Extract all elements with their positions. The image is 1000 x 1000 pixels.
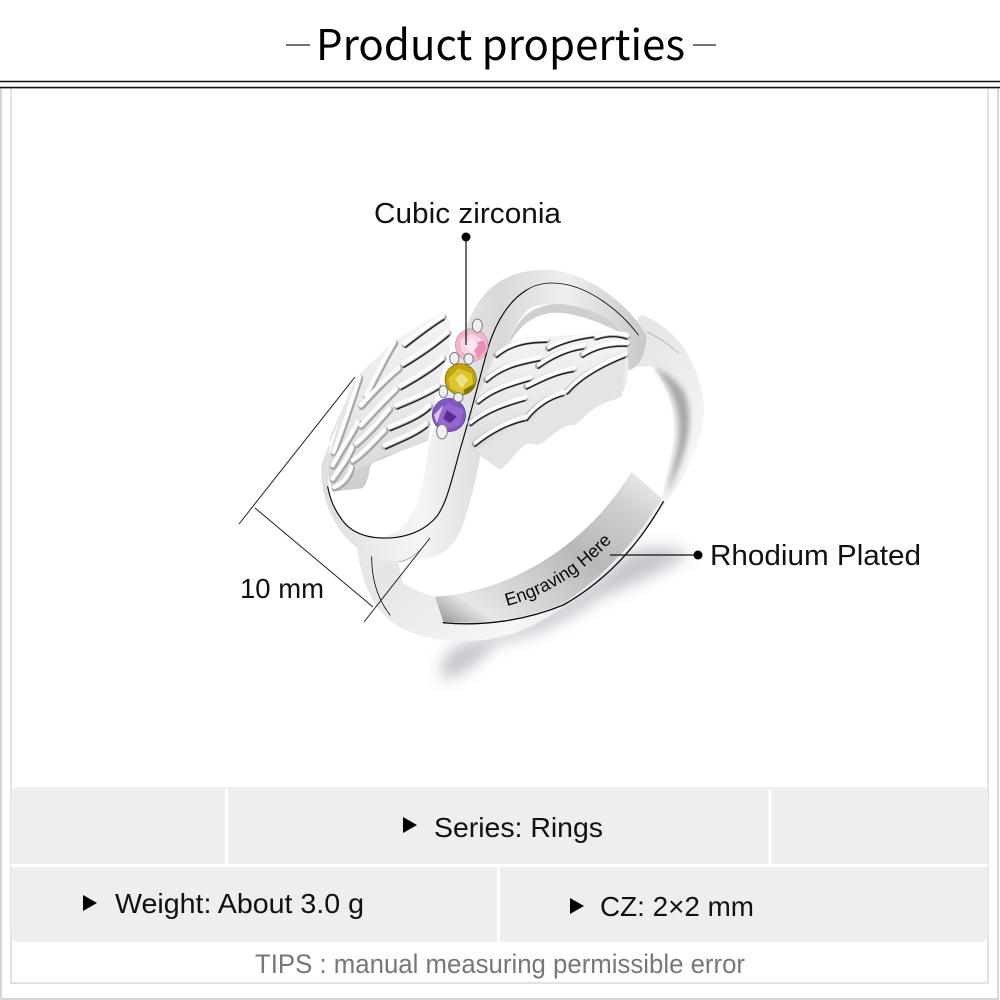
stones: [432, 319, 488, 439]
callout: cubic zirconia: [374, 198, 562, 345]
ribbon groove: [328, 283, 638, 562]
left lobe hole: [368, 440, 427, 528]
infinity ribbon: [321, 270, 647, 561]
right wing: [467, 332, 628, 470]
spec: series: Series: Rings: [434, 812, 603, 843]
title: Product properties: [316, 12, 685, 73]
pink stone: [455, 329, 488, 361]
spec: weight: Weight: About 3.0 g: [115, 888, 364, 919]
band groove: [372, 332, 678, 624]
specs table: [11, 787, 988, 942]
dimension: 10 mm: [239, 377, 430, 622]
callout: rhodium plated: [610, 540, 921, 572]
left wing: [328, 313, 450, 492]
ring shadow: [441, 548, 690, 680]
callout: rhodium plated: Rhodium Plated: [710, 540, 921, 572]
yellow stone: [445, 364, 476, 395]
purple stone: [432, 398, 466, 432]
band shading: [654, 367, 689, 495]
callout: cubic zirconia: Cubic zirconia: [374, 198, 562, 230]
ring illustration: [321, 270, 704, 680]
engraving text: Engraving Here: [504, 536, 610, 606]
dimension: 10 mm: 10 mm: [240, 573, 324, 604]
tips note: TIPS : manual measuring permissible error: [255, 949, 745, 979]
top loop underside: [507, 304, 627, 348]
inner band surface: [435, 472, 662, 623]
prongs: [437, 319, 482, 439]
spec: cz: CZ: 2×2 mm: [600, 891, 754, 922]
band: [357, 315, 704, 641]
